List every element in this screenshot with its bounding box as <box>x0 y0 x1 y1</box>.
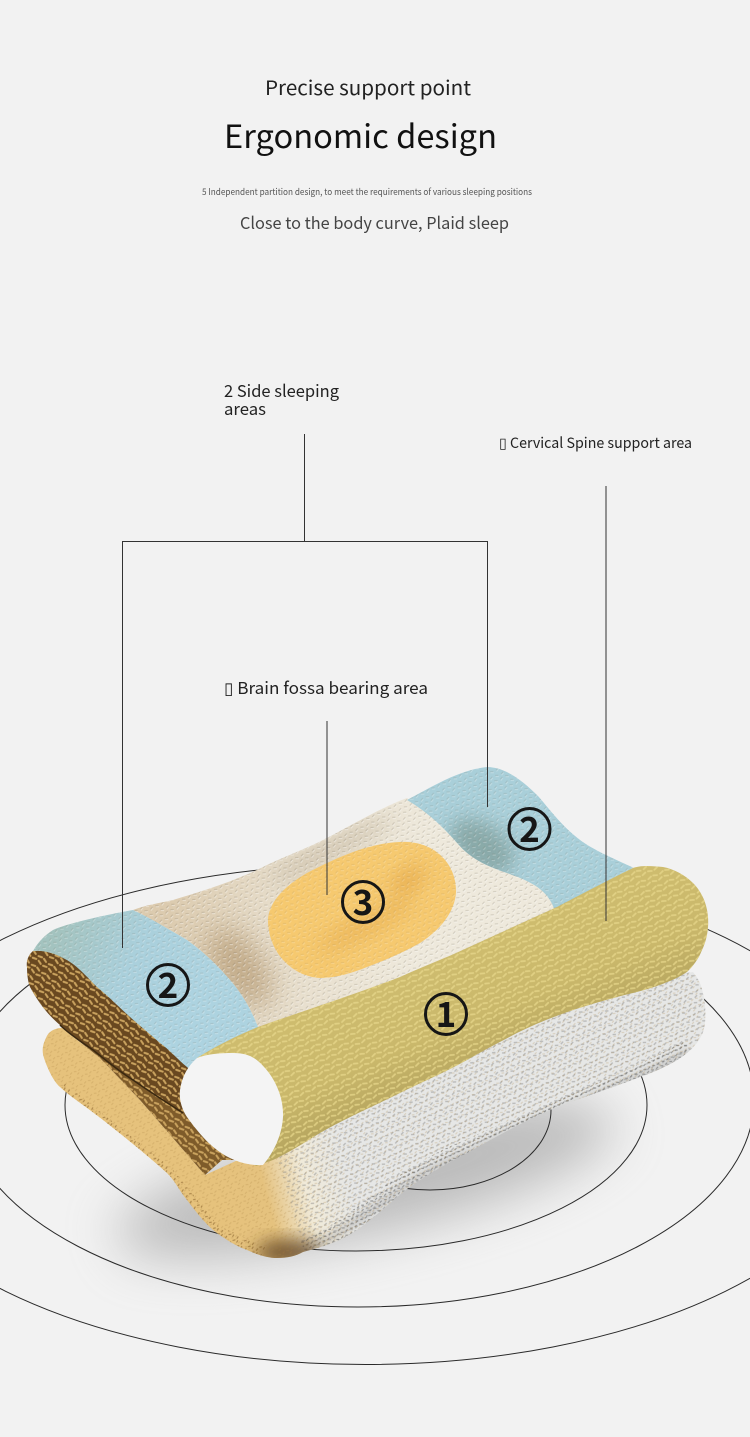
brown pillow side <box>27 950 200 1113</box>
blue side panel left <box>33 910 270 1075</box>
marker 2 right <box>509 802 550 853</box>
bolster end cap cut-out <box>180 1053 283 1165</box>
pillow illustration <box>27 767 708 1264</box>
small description: 5 Independent partition design, to meet the requirements of various sleeping positions <box>202 185 532 198</box>
label: brain fossa bearing: ▯ Brain fossa bearing area <box>224 675 428 699</box>
cervical bolster <box>180 866 708 1166</box>
marker 3 <box>342 875 384 926</box>
marker 2 right: 2 <box>519 802 540 853</box>
marker 1 <box>426 987 466 1038</box>
marker 3: 3 <box>353 875 373 926</box>
leader lines <box>122 434 606 948</box>
beige centre panel <box>133 798 554 1027</box>
heading block <box>202 72 532 234</box>
lower pillow layer <box>43 972 705 1264</box>
eyebrow heading: Precise support point <box>265 72 471 101</box>
main title: Ergonomic design <box>224 112 497 158</box>
label: side sleeping areas: areas <box>224 396 266 420</box>
pillow shadow <box>104 1069 626 1291</box>
marker 1: 1 <box>436 987 456 1038</box>
brown lower strip <box>60 1026 245 1175</box>
label: cervical spine support: ▯ Cervical Spine support area <box>499 432 692 453</box>
subtitle: Close to the body curve, Plaid sleep <box>240 210 509 234</box>
label: side sleeping areas: 2 Side sleeping <box>224 378 340 402</box>
marker 2 left <box>148 958 188 1009</box>
blue side panel right <box>407 767 638 915</box>
marker 2 left: 2 <box>158 958 178 1009</box>
label: side sleeping areas <box>224 378 340 420</box>
orange head rest zone <box>268 842 456 978</box>
concentric ground rings <box>0 864 750 1364</box>
